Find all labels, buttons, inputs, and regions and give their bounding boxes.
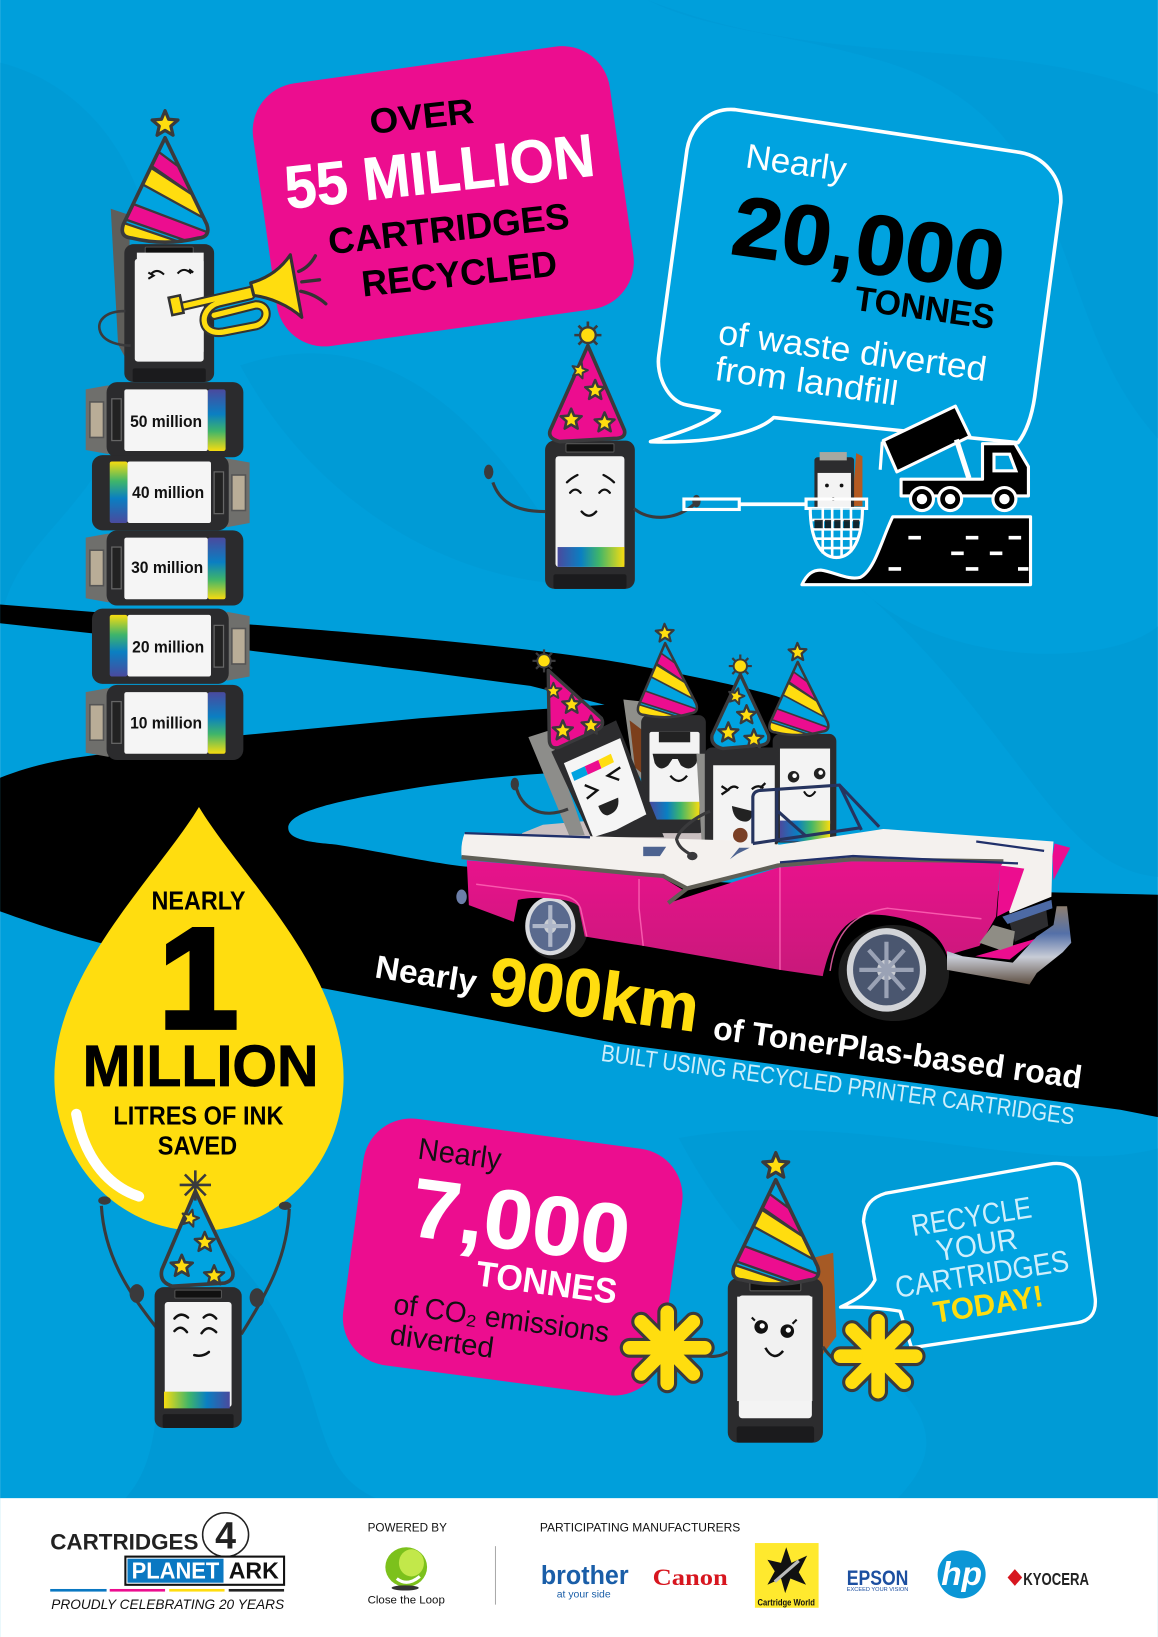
cartridge: 20 million bbox=[92, 609, 250, 684]
cartridge: 50 million bbox=[86, 382, 243, 457]
logo: cartridges 4 planet ark bbox=[50, 1513, 284, 1612]
logo: close the loop: Close the Loop bbox=[368, 1595, 445, 1607]
car hood lines bbox=[465, 833, 1044, 863]
text: diverted: diverted bbox=[388, 1319, 496, 1365]
text: your: YOUR bbox=[934, 1223, 1020, 1268]
panel: car with four cartridges bbox=[456, 623, 1071, 1021]
hat: pink stars bbox=[550, 322, 625, 442]
cartridge: 30 million bbox=[86, 530, 243, 606]
logo: cartridge world: Cartridge World bbox=[758, 1597, 815, 1608]
text: recycle: RECYCLE bbox=[909, 1192, 1034, 1243]
icon: sound lines bbox=[299, 256, 326, 304]
logo: cartridges 4 planet ark: 4 bbox=[215, 1514, 236, 1556]
logo: cartridges 4 planet ark: PROUDLY CELEBRATING 20 YEARS bbox=[51, 1597, 284, 1612]
character: smiling driver cartridge bbox=[696, 655, 779, 847]
drop highlight bbox=[76, 1114, 139, 1196]
character: winking eyes cartridge bbox=[761, 642, 836, 843]
text: tonnes: TONNES bbox=[474, 1253, 620, 1312]
logo: kyocera: KYOCERA bbox=[1023, 1569, 1089, 1589]
text: recycled: RECYCLED bbox=[359, 243, 559, 305]
icon: right pom-pom bbox=[841, 1321, 916, 1392]
cartridge: 10 million: 10 million bbox=[130, 715, 202, 733]
car fin and front fender bbox=[997, 844, 1070, 917]
text: 55 million: 55 MILLION bbox=[281, 121, 598, 222]
text: powered by: POWERED BY bbox=[368, 1521, 447, 1535]
icon: small cartridge bbox=[814, 452, 862, 509]
logo: hp bbox=[938, 1550, 986, 1598]
car white top bbox=[461, 829, 1054, 914]
stacked cartridge counter bbox=[86, 382, 250, 760]
logo: cartridges 4 planet ark: ARK bbox=[229, 1558, 279, 1584]
text: from landfill: from landfill bbox=[713, 350, 900, 413]
car pink body bbox=[467, 860, 1003, 976]
road headline bbox=[373, 944, 1084, 1131]
divider bbox=[495, 1546, 496, 1605]
character: cartridge with net bbox=[484, 322, 701, 589]
panel: 7,000 tonnes callout bbox=[337, 1113, 689, 1401]
car grille bbox=[975, 900, 1052, 959]
panel: ink drop bbox=[54, 807, 344, 1231]
cartridge: 30 million: 30 million bbox=[131, 559, 203, 577]
text: 900km: 900km bbox=[485, 944, 704, 1046]
text: 7,000: 7,000 bbox=[406, 1160, 636, 1282]
text: million: MILLION bbox=[83, 1034, 319, 1099]
logo: epson: EPSON bbox=[847, 1567, 908, 1590]
cartridge: 40 million bbox=[92, 455, 250, 530]
logo: close the loop bbox=[368, 1547, 445, 1607]
text: tonnes: TONNES bbox=[852, 280, 997, 337]
cartridge: 20 million: 20 million bbox=[132, 639, 204, 657]
text: cartridges: CARTRIDGES bbox=[893, 1245, 1071, 1305]
text: over: OVER bbox=[368, 91, 476, 142]
text: participating manufacturers: PARTICIPATING MANUFACTURERS bbox=[540, 1521, 740, 1535]
icon: trumpet bbox=[169, 255, 302, 332]
text: 1: 1 bbox=[159, 899, 238, 1058]
cartridge: 40 million: 40 million bbox=[132, 484, 204, 502]
logo: hp: hp bbox=[941, 1556, 982, 1593]
hat: pink stars tilted bbox=[532, 649, 603, 748]
speech bubble: recycle today bbox=[841, 1163, 1095, 1348]
front wheel bbox=[838, 925, 949, 1021]
character: trumpet cartridge bbox=[99, 111, 326, 382]
text: nearly: NEARLY bbox=[151, 885, 245, 915]
car windshield bbox=[753, 785, 879, 844]
car door details bbox=[643, 847, 750, 859]
text: litres of ink: LITRES OF INK bbox=[113, 1100, 284, 1130]
cartridge: 50 million: 50 million bbox=[130, 413, 202, 431]
icon: net catching cartridge bbox=[684, 452, 867, 557]
text: cartridges: CARTRIDGES bbox=[326, 195, 571, 262]
logo: cartridges 4 planet ark: CARTRIDGES bbox=[50, 1529, 198, 1554]
logo: cartridge world bbox=[755, 1543, 819, 1608]
logo: cartridges 4 planet ark: PLANET bbox=[132, 1558, 219, 1584]
text: 20,000: 20,000 bbox=[727, 177, 1011, 309]
logo: brother: brother bbox=[541, 1560, 629, 1590]
logo: canon: Canon bbox=[653, 1565, 728, 1590]
icon: landfill mound bbox=[802, 517, 1031, 585]
driver arm bbox=[677, 811, 748, 860]
text: nearly: Nearly bbox=[743, 138, 850, 189]
logo: brother: at your side bbox=[557, 1589, 611, 1600]
text: saved: SAVED bbox=[158, 1131, 237, 1161]
hat: blue stars bbox=[712, 655, 769, 749]
icon: dump truck bbox=[880, 406, 1028, 511]
icon: left pom-pom bbox=[630, 1312, 705, 1383]
character: cool sunglasses cartridge bbox=[623, 623, 706, 833]
text: nearly: Nearly bbox=[416, 1133, 504, 1177]
car interior bbox=[522, 821, 778, 846]
car front bumper bbox=[947, 906, 1071, 984]
text: nearly: Nearly bbox=[373, 949, 479, 1000]
car rear bumper bbox=[456, 889, 467, 904]
panel: 55 million callout bbox=[246, 40, 640, 353]
character: cartridge holding the drop bbox=[98, 1170, 291, 1428]
winding black road bbox=[0, 604, 1158, 1117]
cartridge: 10 million bbox=[86, 685, 243, 760]
footer band bbox=[0, 1498, 1158, 1637]
text: of tonerplas-based road: of TonerPlas-based road bbox=[711, 1010, 1084, 1096]
character: laughing tilted cartridge bbox=[511, 649, 664, 837]
logo: epson: EXCEED YOUR VISION bbox=[847, 1587, 908, 1593]
text: of waste diverted: of waste diverted bbox=[716, 314, 989, 389]
character: pom-pom cartridge bbox=[630, 1153, 916, 1443]
text: of co2 emissions: of CO₂ emissions bbox=[392, 1289, 611, 1349]
rear wheel bbox=[525, 897, 588, 959]
car body highlights bbox=[476, 867, 981, 971]
speech bubble: 20,000 tonnes bbox=[651, 109, 1061, 443]
hat: blue stars with burst bbox=[161, 1170, 233, 1286]
text: today: TODAY! bbox=[931, 1280, 1046, 1330]
text: built using recycled printer cartridges: BUILT USING RECYCLED PRINTER CARTRIDGES bbox=[600, 1040, 1076, 1131]
car chrome trim bbox=[462, 857, 1003, 903]
logo: kyocera bbox=[1008, 1569, 1089, 1589]
